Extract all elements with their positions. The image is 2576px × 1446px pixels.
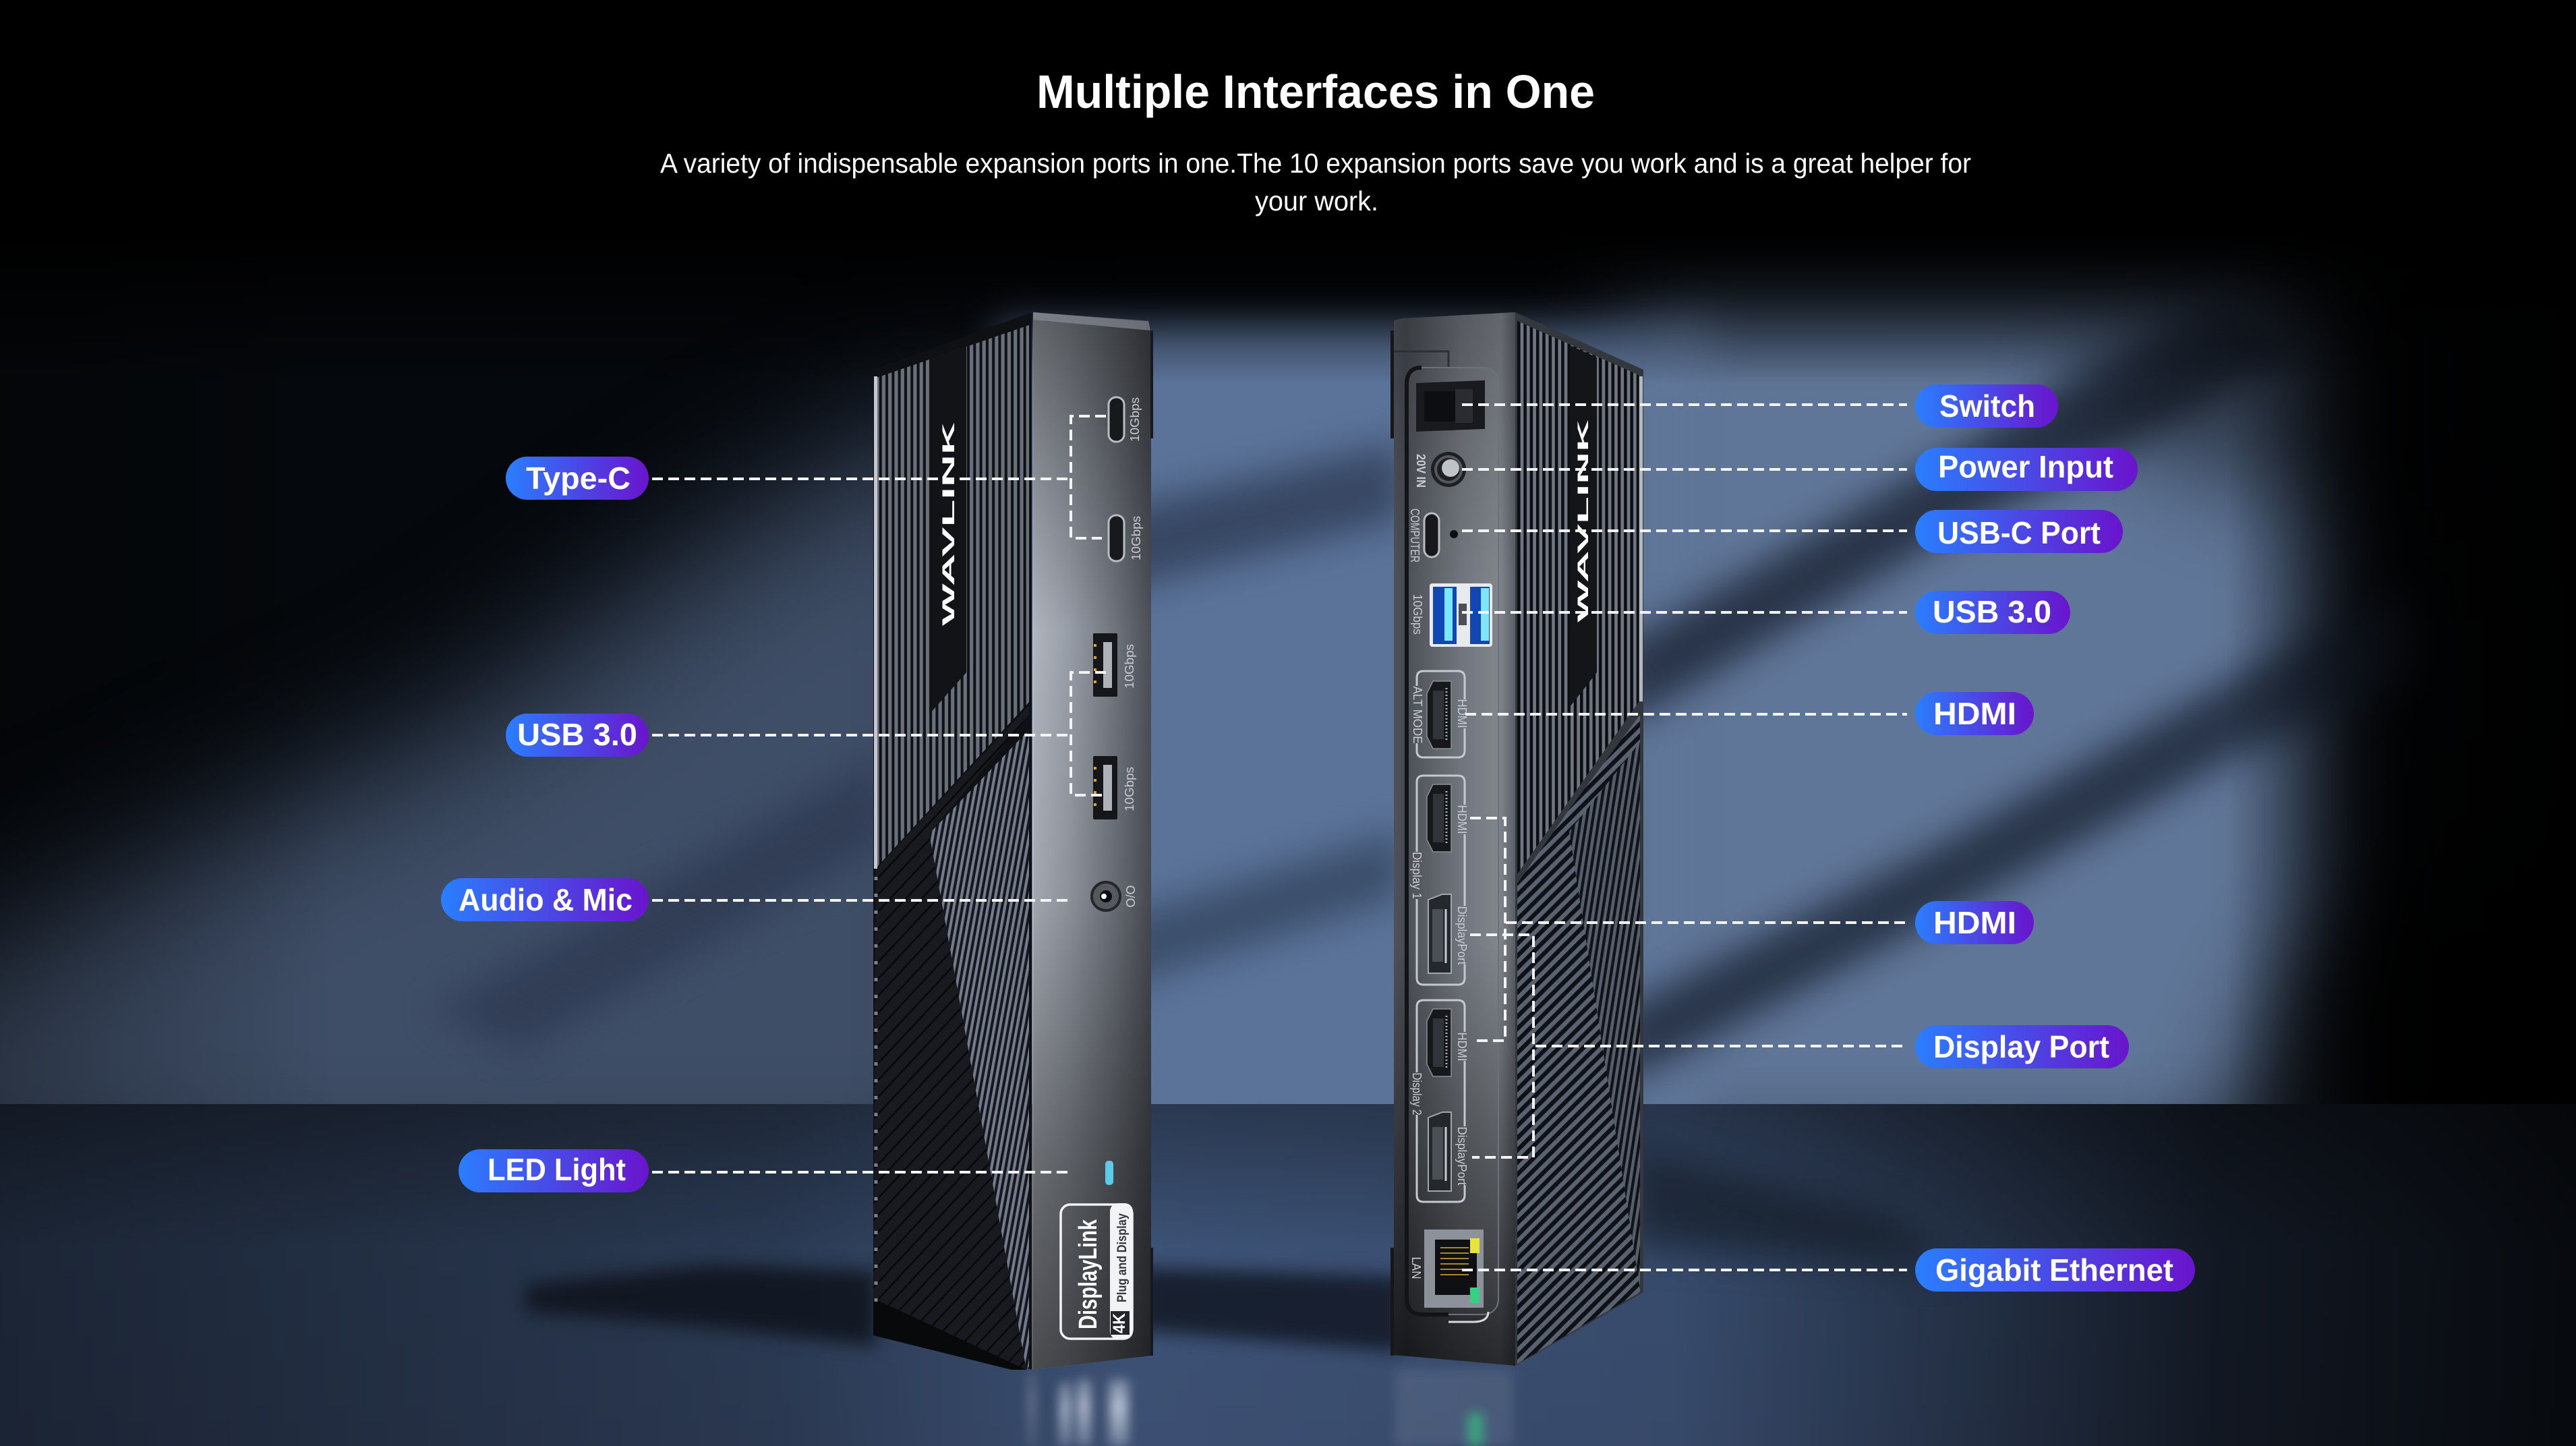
connector: USB-C Port <box>1462 529 1907 532</box>
audio jack <box>1092 882 1120 910</box>
right device logo panel <box>1570 345 1597 707</box>
power switch <box>1416 380 1485 432</box>
label: left USB 3.0: USB 3.0 <box>517 717 637 752</box>
left device finned side <box>873 312 1032 1370</box>
left USB-C ports <box>1109 397 1124 561</box>
rear lower bracket mark <box>1448 1312 1488 1322</box>
subtitle text block: A variety of indispensable expansion ports in one.The 10 expansion ports save you work and is a great helper for <box>660 148 1971 179</box>
left USB-A ports <box>1093 633 1117 819</box>
right device logo panel: WAVLINK <box>1575 420 1591 623</box>
label: Display Port: Display Port <box>1933 1029 2109 1064</box>
DisplayLink badge: 4K <box>1110 1313 1129 1333</box>
rear port labels: LAN <box>1409 1257 1423 1279</box>
power input jack <box>1431 452 1466 487</box>
connector: Gigabit Ethernet <box>1462 1269 1907 1271</box>
connector: Display Port pair <box>1470 935 1907 1157</box>
right device reflection on floor <box>1395 1369 1513 1446</box>
rear port labels: COMPUTER <box>1408 509 1422 562</box>
connector: Switch <box>1462 403 1907 406</box>
left port labels: 10Gbps <box>1128 397 1142 442</box>
label: Gigabit Ethernet: Gigabit Ethernet <box>1935 1252 2173 1288</box>
label: Power Input <box>1915 448 2138 491</box>
left port labels: 10Gbps <box>1123 767 1136 811</box>
left port labels: O/O <box>1124 885 1138 908</box>
rear port labels: HDMI <box>1455 699 1469 728</box>
connector: right USB 3.0 <box>1462 611 1907 614</box>
left device: front dock with Type-C, USB, audio, LED <box>873 312 1153 1446</box>
connector: Audio and Mic <box>652 899 1068 902</box>
label: HDMI pair: HDMI <box>1933 905 2016 940</box>
rear HDMI ports <box>1427 681 1451 1076</box>
connector: HDMI single <box>1465 713 1907 716</box>
label: LED Light: LED Light <box>488 1152 626 1187</box>
label: Switch: Switch <box>1939 388 2035 424</box>
left device logo panel: WAVLINK <box>939 422 958 626</box>
title: Multiple Interfaces in One <box>1036 65 1595 118</box>
subtitle text block: your work. <box>1255 185 1378 216</box>
connector: Power Input <box>1462 468 1907 471</box>
DisplayLink badge <box>1061 1203 1133 1339</box>
rear port labels <box>1408 454 1469 1279</box>
blue dual USB 3.0 ports <box>1430 583 1492 647</box>
gigabit ethernet port <box>1424 1230 1484 1308</box>
rear port labels: ALT MODE <box>1411 687 1424 743</box>
label: HDMI pair <box>1915 901 2034 944</box>
left device reflection on floor <box>1029 1372 1128 1446</box>
LED light <box>1105 1161 1113 1185</box>
connector: HDMI pair <box>1470 818 1907 1041</box>
label: right USB 3.0 <box>1915 591 2070 634</box>
rear DisplayPort ports <box>1428 894 1451 1191</box>
label: Type-C <box>506 457 649 500</box>
label: Power Input: Power Input <box>1938 449 2113 484</box>
label: left USB 3.0 <box>506 714 649 757</box>
label: Type-C: Type-C <box>526 461 631 496</box>
left port labels: 10Gbps <box>1123 644 1136 689</box>
right device: rear dock with inputs and outputs <box>1391 312 1643 1446</box>
subtitle text block <box>660 148 1971 216</box>
rear port labels: 20V IN <box>1414 454 1428 488</box>
label: HDMI single: HDMI <box>1933 696 2016 731</box>
rear port labels: Display 2 <box>1410 1072 1424 1116</box>
DisplayLink badge: DisplayLink <box>1074 1219 1103 1329</box>
connector: LED Light <box>652 1171 1068 1174</box>
connector: left USB 3.0 <box>652 672 1106 795</box>
connector: Type-C <box>652 416 1106 538</box>
rear port labels: HDMI <box>1455 805 1469 834</box>
left port labels <box>1123 397 1143 908</box>
label: Switch <box>1915 384 2058 428</box>
label: LED Light <box>459 1149 649 1192</box>
rear port labels: HDMI <box>1455 1032 1469 1062</box>
left port labels: 10Gbps <box>1130 516 1143 560</box>
label: Display Port <box>1915 1025 2129 1068</box>
rear HDMI and DisplayPort brackets <box>1417 671 1465 1202</box>
rear port labels: 10Gbps <box>1411 594 1424 635</box>
label: HDMI single <box>1915 692 2034 735</box>
label: Audio and Mic: Audio & Mic <box>459 882 633 917</box>
left device front face <box>1032 312 1153 1370</box>
rear port labels: DisplayPort <box>1455 1126 1469 1186</box>
rear port labels: Display 1 <box>1410 852 1424 899</box>
right device finned side <box>1515 312 1643 1366</box>
right USB-C port and status dot <box>1424 513 1458 557</box>
rear port labels: DisplayPort <box>1455 906 1469 964</box>
label: USB-C Port: USB-C Port <box>1937 515 2101 550</box>
label: USB-C Port <box>1915 510 2123 553</box>
right device rear face <box>1391 312 1515 1366</box>
left device logo panel <box>929 345 966 714</box>
DisplayLink badge: Plug and Display <box>1115 1213 1130 1302</box>
label: right USB 3.0: USB 3.0 <box>1933 594 2051 629</box>
